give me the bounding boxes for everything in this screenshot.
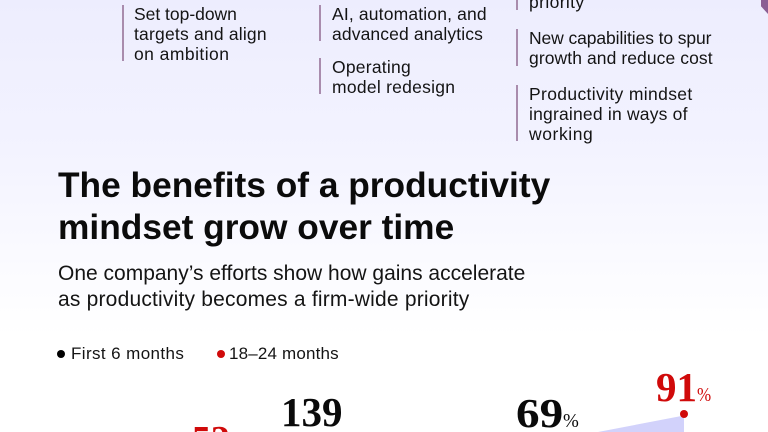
value: 91%: % bbox=[697, 384, 711, 406]
subheading: One company’s efforts show how gains accelerate bbox=[58, 262, 525, 285]
item: new capabilities: New capabilities to spur bbox=[529, 28, 711, 48]
marker: red dot bbox=[680, 410, 688, 418]
item: priority bbox=[516, 0, 585, 10]
item: productivity mindset bbox=[516, 85, 693, 141]
item: top-down targets: Set top-down bbox=[134, 4, 237, 24]
item: top-down targets: on ambition bbox=[134, 44, 229, 64]
value: 91%: 91 bbox=[656, 364, 697, 410]
item: operating model bbox=[319, 58, 455, 94]
item: new capabilities: growth and reduce cost bbox=[529, 48, 713, 68]
item: AI and automation bbox=[319, 5, 487, 41]
item: productivity mindset: ingrained in ways of bbox=[529, 104, 688, 124]
subheading bbox=[58, 262, 525, 311]
item: productivity mindset: Productivity mindset bbox=[529, 84, 693, 104]
legend: first 6 months: First 6 months bbox=[71, 344, 184, 363]
item: productivity mindset: working bbox=[529, 124, 593, 144]
corner decoration bbox=[761, 0, 768, 14]
item: top-down targets: targets and align bbox=[134, 24, 267, 44]
chart: area bbox=[598, 416, 684, 432]
heading bbox=[58, 166, 550, 247]
item: new capabilities bbox=[516, 29, 713, 66]
heading: mindset grow over time bbox=[58, 208, 454, 247]
item: AI and automation: AI, automation, and bbox=[332, 4, 487, 24]
value: 69%: % bbox=[563, 410, 579, 432]
item: operating model: model redesign bbox=[332, 77, 455, 97]
heading: The benefits of a productivity bbox=[58, 166, 550, 205]
item: AI and automation: advanced analytics bbox=[332, 24, 483, 44]
legend bbox=[57, 344, 339, 363]
item: operating model: Operating bbox=[332, 57, 411, 77]
subheading: as productivity becomes a firm-wide priority bbox=[58, 288, 469, 311]
legend: 18-24 months: 18–24 months bbox=[229, 344, 339, 363]
item: top-down targets bbox=[122, 5, 267, 61]
